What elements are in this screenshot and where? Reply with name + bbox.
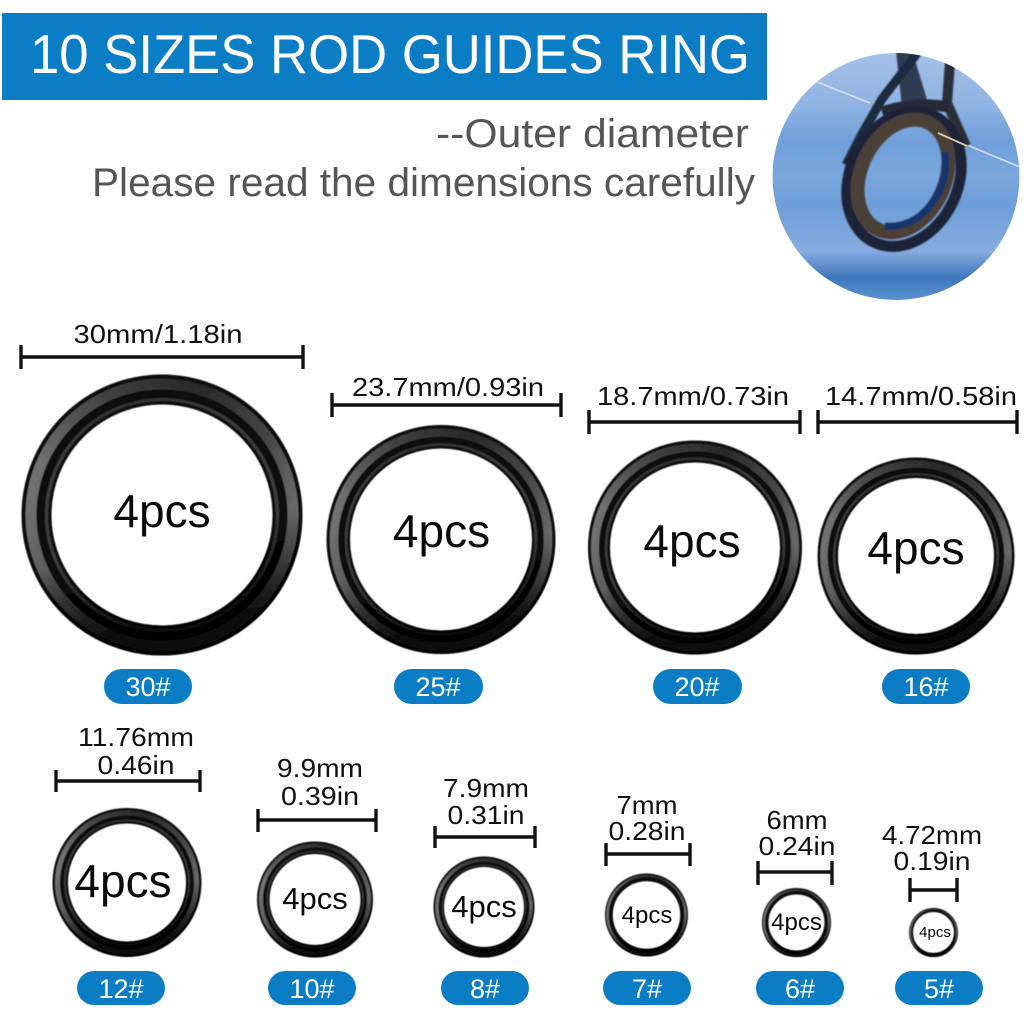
size 12#: dimension, ring, label: 11.76mm (78, 722, 194, 752)
title banner: 10 SIZES ROD GUIDES RING (30, 23, 750, 85)
size 6#: dimension, ring, label: 0.24in (758, 831, 836, 861)
size 7#: dimension, ring, label: 0.28in (608, 816, 686, 846)
size 16#: dimension, ring, label: 14.7mm/0.58in (825, 381, 1017, 411)
size 20#: dimension, ring, label: 18.7mm/0.73in (597, 381, 789, 411)
size 8#: dimension, ring, label: 0.31in (448, 800, 524, 830)
size 6#: dimension, ring, label: 6mm (766, 805, 828, 835)
size 8#: dimension, ring, label: 7.9mm (443, 773, 529, 803)
title banner (2, 13, 767, 100)
size 30#: dimension, ring, label: 4pcs (113, 485, 211, 537)
size 12#: dimension, ring, label: 12# (98, 974, 144, 1004)
size 5#: dimension, ring, label: 4pcs (919, 924, 951, 941)
size 6#: dimension, ring, label (756, 805, 844, 1005)
photo: rod guide ring on fishing line (772, 50, 1020, 300)
size 5#: dimension, ring, label: 4.72mm (882, 820, 982, 850)
size 30#: dimension, ring, label (21, 319, 303, 704)
size 25#: dimension, ring, label: 4pcs (393, 505, 490, 557)
size 10#: dimension, ring, label: 9.9mm (277, 753, 363, 783)
subtitle text: --Outer diameter (436, 112, 749, 156)
size 20#: dimension, ring, label (589, 381, 800, 704)
size 20#: dimension, ring, label: 4pcs (643, 515, 741, 567)
size 25#: dimension, ring, label: 23.7mm/0.93in (352, 372, 544, 402)
size 10#: dimension, ring, label: 10# (289, 974, 335, 1004)
size 6#: dimension, ring, label: 6# (785, 974, 815, 1004)
size 7#: dimension, ring, label: 7# (632, 974, 662, 1004)
size 8#: dimension, ring, label: 4pcs (451, 889, 517, 924)
size 8#: dimension, ring, label: 8# (470, 974, 500, 1004)
size 10#: dimension, ring, label (258, 753, 376, 1005)
size 5#: dimension, ring, label: 5# (924, 974, 954, 1004)
size 12#: dimension, ring, label: 0.46in (98, 750, 174, 780)
size 10#: dimension, ring, label: 0.39in (281, 781, 359, 811)
size 7#: dimension, ring, label: 4pcs (622, 902, 672, 929)
size 12#: dimension, ring, label (56, 722, 200, 1005)
size 7#: dimension, ring, label (603, 790, 691, 1005)
size 25#: dimension, ring, label (332, 372, 561, 704)
subtitle text (92, 112, 755, 205)
size 16#: dimension, ring, label (818, 381, 1017, 704)
size 20#: dimension, ring, label: 20# (674, 672, 720, 702)
size 5#: dimension, ring, label: 0.19in (894, 846, 970, 876)
size 6#: dimension, ring, label: 4pcs (771, 909, 822, 936)
size 30#: dimension, ring, label: 30# (125, 672, 171, 702)
subtitle text: Please read the dimensions carefully (92, 161, 755, 205)
size 7#: dimension, ring, label: 7mm (616, 790, 678, 820)
size 8#: dimension, ring, label (435, 773, 535, 1005)
size 10#: dimension, ring, label: 4pcs (282, 881, 348, 916)
size 12#: dimension, ring, label: 4pcs (74, 855, 172, 907)
size 16#: dimension, ring, label: 16# (903, 672, 949, 702)
size 5#: dimension, ring, label (882, 820, 983, 1005)
size 25#: dimension, ring, label: 25# (415, 672, 461, 702)
size 30#: dimension, ring, label: 30mm/1.18in (74, 319, 242, 349)
size 16#: dimension, ring, label: 4pcs (867, 522, 965, 574)
